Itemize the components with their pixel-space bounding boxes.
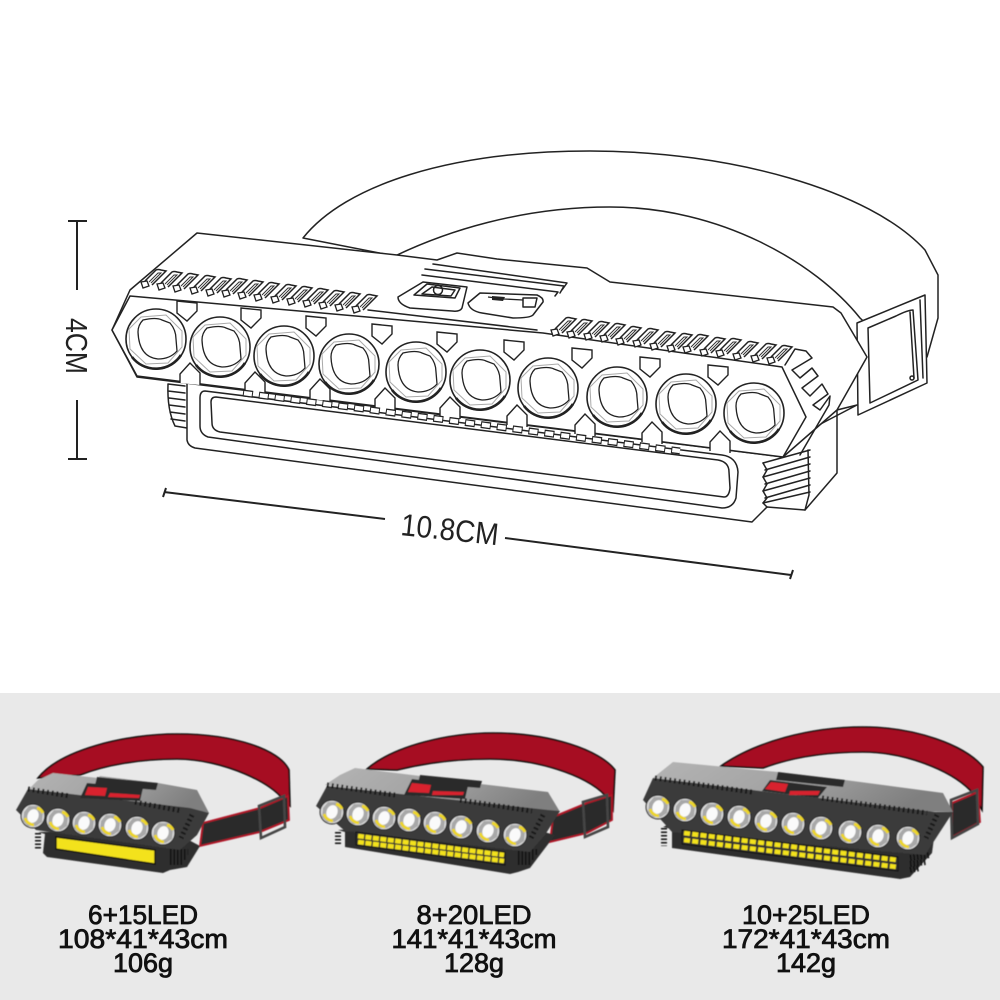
caption: 8+20LED: 8+20LED: [416, 900, 532, 930]
switch: [762, 772, 845, 798]
caption: 8+20LED: 128g: [444, 948, 504, 978]
vent slots: [327, 785, 543, 838]
caption: 10+25LED: 142g: [776, 948, 836, 978]
vent slots: [655, 778, 937, 838]
lenses: [320, 800, 528, 848]
variant 3 headlamp: 10+25 LED: [643, 727, 983, 879]
light bar body: [38, 830, 200, 873]
front plate: [316, 786, 560, 852]
lenses: [20, 804, 176, 846]
side fins: [664, 828, 930, 870]
line drawing: headlamp with 10 lenses: [112, 151, 938, 522]
front plate: [16, 789, 209, 850]
caption: 6+15LED: 6+15LED: [88, 900, 198, 930]
caption: 10+25LED: 10+25LED: [742, 900, 870, 930]
strap buckle: [951, 790, 978, 838]
switch: [80, 777, 158, 801]
caption: 6+15LED: 106g: [113, 948, 173, 978]
gray shell: [28, 773, 209, 815]
caption: 6+15LED: 108*41*43cm: [58, 924, 228, 954]
side fins: [338, 832, 538, 862]
bottom panel: variants: [0, 693, 1000, 1000]
vent slots: [28, 789, 192, 838]
caption: 8+20LED: [392, 900, 556, 978]
gray shell: [325, 768, 560, 815]
dimension: width 10.8CM: [163, 488, 793, 579]
front plate: [643, 778, 953, 855]
top shell: [112, 233, 867, 457]
caption: 6+15LED: [58, 900, 228, 978]
light bar body: [338, 820, 555, 874]
light bar body: [663, 810, 935, 879]
LED chips row: [243, 393, 680, 451]
lenses: [646, 794, 920, 850]
red band: [367, 733, 615, 810]
caption: 8+20LED: 141*41*43cm: [392, 924, 556, 954]
dimension: width 10.8CM: 10.8CM: [399, 507, 500, 552]
gray shell: [653, 762, 953, 812]
plate top groove: [368, 310, 537, 330]
dimension: height 4CM: [59, 221, 94, 459]
side fins left: [168, 384, 187, 428]
lower light bar frame: [200, 391, 738, 508]
side fins right: [763, 450, 810, 510]
dimension: height 4CM: 4CM: [59, 318, 94, 374]
right cooling fins: [551, 318, 830, 455]
buckle: [857, 295, 927, 415]
red band: [38, 734, 290, 806]
lower body: [187, 380, 857, 522]
LED panel: [356, 832, 505, 865]
LED panel: [682, 830, 898, 871]
caption: 10+25LED: 172*41*43cm: [722, 924, 890, 954]
variant 2 headlamp: 8+20 LED: [316, 733, 615, 874]
black strap: [952, 792, 980, 837]
switch: [404, 775, 482, 799]
black strap: [550, 795, 612, 842]
red band: [721, 727, 983, 810]
black strap: [200, 796, 289, 846]
side fins: [38, 833, 188, 862]
left cooling fins: [141, 270, 377, 313]
strap buckle: [583, 795, 608, 837]
switch panel: [398, 264, 567, 318]
COB panel: [56, 837, 155, 864]
front plate: [112, 296, 806, 457]
strap buckle: [259, 796, 285, 838]
tab and lens array: [126, 301, 784, 453]
head band: [303, 151, 938, 360]
variant 1 headlamp: 6+15 LED: [16, 734, 290, 873]
caption: 10+25LED: [722, 900, 890, 978]
